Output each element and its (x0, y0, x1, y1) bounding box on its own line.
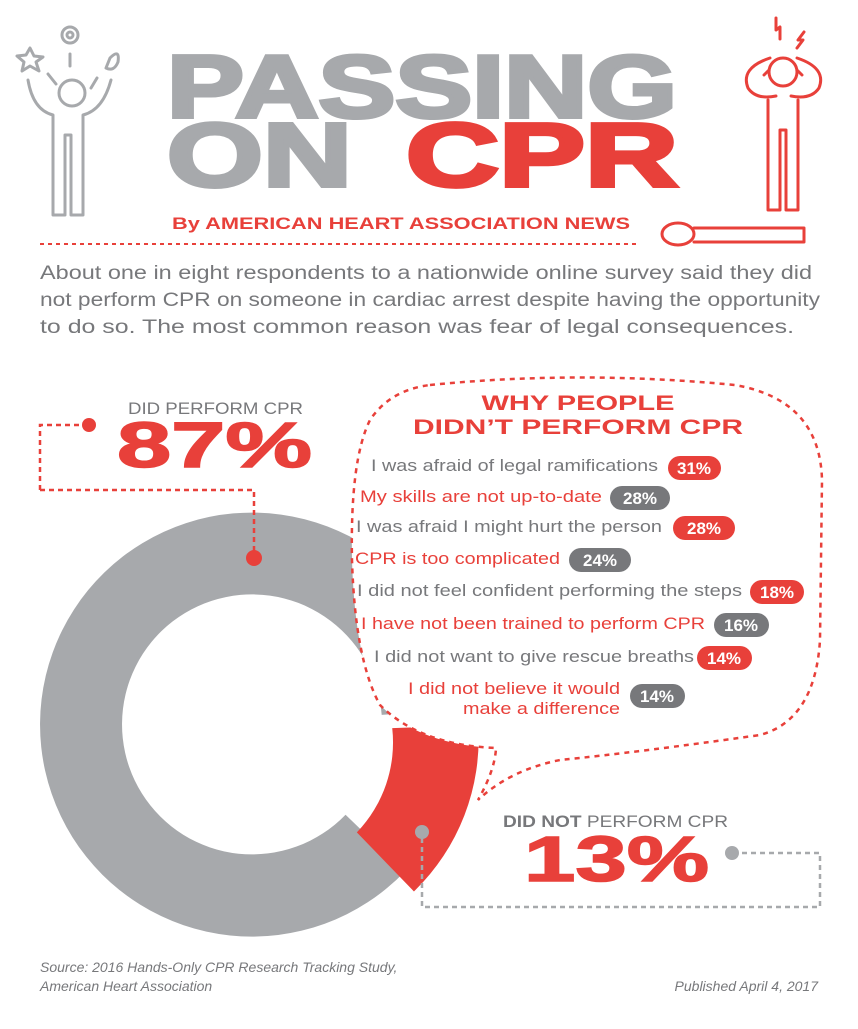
reasons list: I was afraid of legal ramifications (371, 456, 658, 475)
callout: did not perform 13%: 13% (524, 823, 709, 895)
intro paragraph: About one in eight respondents to a nationwide online survey said they did (40, 263, 812, 284)
reasons list: 18% (760, 583, 794, 602)
reasons list: CPR is too complicated (355, 549, 560, 568)
title (167, 37, 678, 206)
bubble heading (413, 392, 743, 439)
title: ON (167, 106, 352, 206)
intro paragraph: not perform CPR on someone in cardiac arrest despite having the opportunity (40, 290, 821, 311)
speech bubble (352, 378, 822, 800)
reasons list: I did not believe it would (408, 679, 620, 698)
intro paragraph: to do so. The most common reason was fear of legal consequences. (40, 317, 794, 338)
reasons list (355, 456, 804, 718)
reasons list: 31% (677, 459, 711, 478)
callout: did perform 87%: DID PERFORM CPR (128, 399, 303, 418)
reasons list: My skills are not up-to-date (360, 487, 602, 506)
reasons list: I have not been trained to perform CPR (361, 614, 705, 633)
reasons list: make a difference (463, 699, 620, 718)
byline: By AMERICAN HEART ASSOCIATION NEWS (172, 214, 630, 233)
callout: did perform 87%: 87% (117, 409, 312, 481)
reasons list: I did not want to give rescue breaths (374, 647, 694, 666)
bubble heading: DIDN’T PERFORM CPR (413, 416, 743, 439)
bubble heading: WHY PEOPLE (482, 392, 674, 415)
reasons list: I did not feel confident performing the steps (357, 581, 742, 600)
reasons list: 24% (583, 551, 617, 570)
reasons list: 28% (623, 489, 657, 508)
reasons list: 28% (687, 519, 721, 538)
title: PASSING (167, 37, 677, 136)
source: Source: 2016 Hands-Only CPR Research Tracking Study, (40, 959, 397, 975)
icon: confused person (17, 27, 118, 215)
published date: Published April 4, 2017 (675, 978, 819, 994)
icon: stressed person and collapsed person (662, 18, 821, 245)
reasons list: I was afraid I might hurt the person (356, 517, 662, 536)
title: CPR (406, 106, 678, 206)
reasons list: 16% (724, 616, 758, 635)
callout: did perform 87% (40, 399, 312, 566)
callout: did not perform 13% (415, 812, 820, 907)
intro paragraph (40, 263, 821, 338)
source (39, 959, 397, 994)
source: American Heart Association (39, 978, 212, 994)
callout: did not perform 13%: DID NOT PERFORM CPR (503, 812, 728, 831)
donut chart (26, 498, 484, 951)
reasons list: 14% (640, 687, 674, 706)
reasons list: 14% (707, 649, 741, 668)
